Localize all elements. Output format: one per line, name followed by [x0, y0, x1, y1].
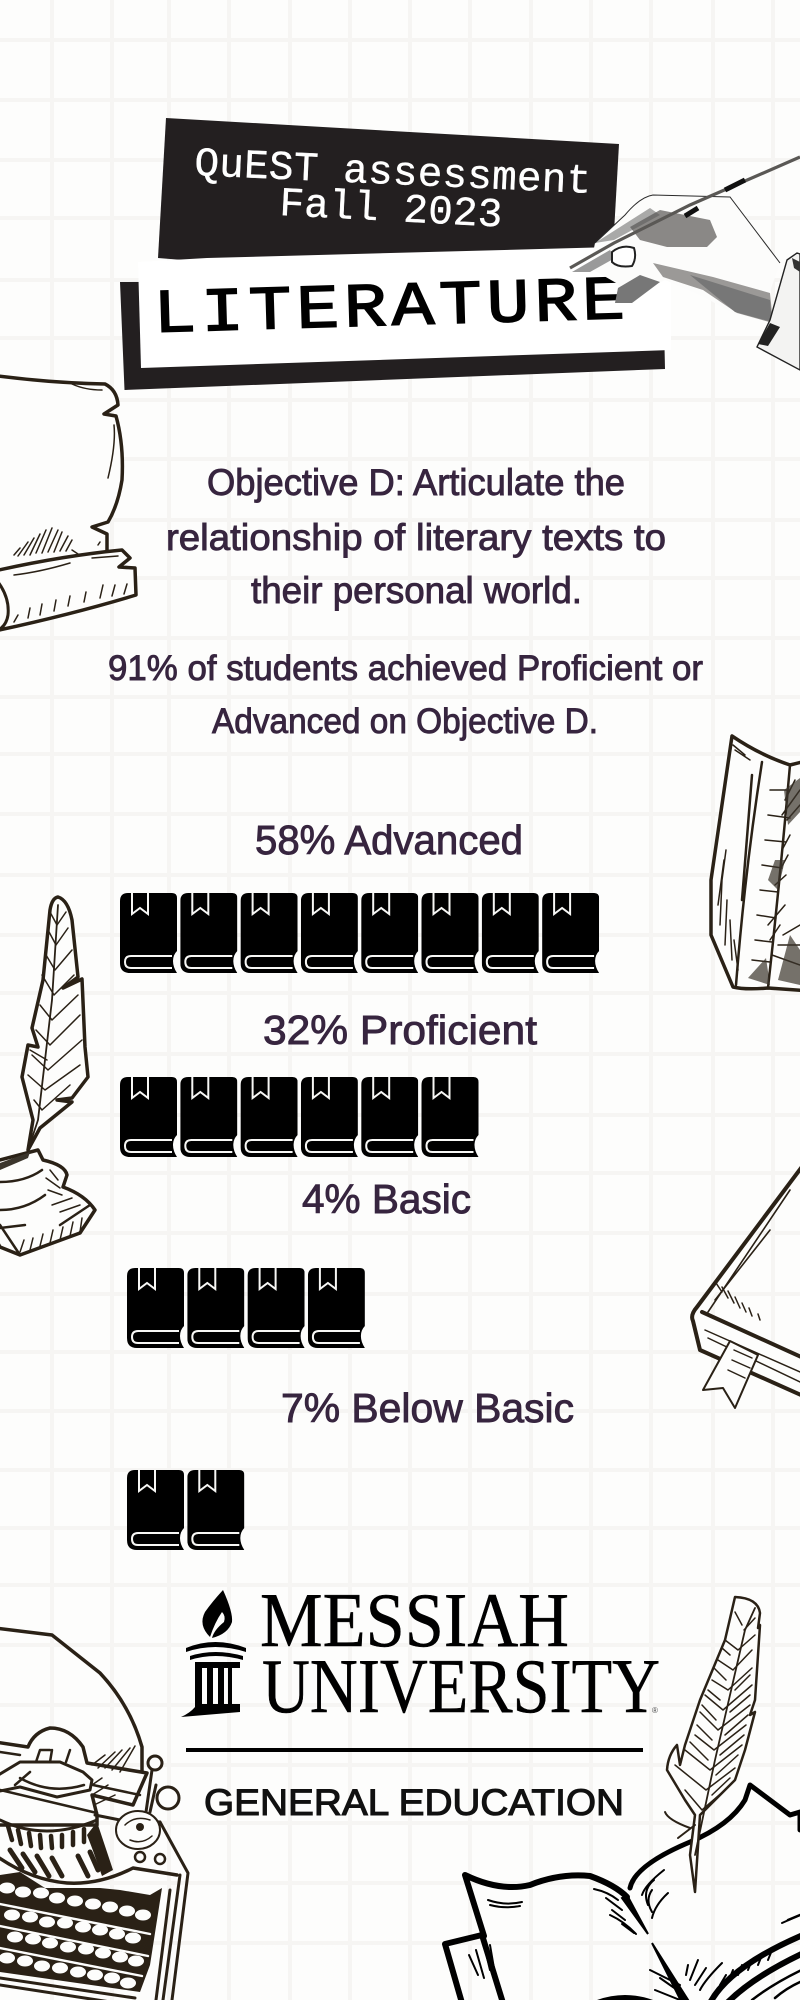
title banner: LITERATURE [120, 247, 671, 390]
label: 4% Basic: 4% Basic [302, 1176, 471, 1222]
heading: objective statement: their personal world. [251, 570, 582, 611]
pictogram: 2 books for Below Basic [127, 1470, 244, 1550]
logo: Messiah University torch [181, 1590, 246, 1717]
illustration: typewriter [0, 1628, 188, 2000]
pictogram: 6 books for Proficient [120, 1077, 478, 1157]
illustration: paper scroll [0, 375, 136, 632]
title banner: QuEST assessment Fall 2023 [158, 118, 619, 262]
title banner: LITERATURE: LITERATURE [152, 267, 626, 351]
title banner: QuEST assessment Fall 2023: Fall 2023 [278, 182, 503, 240]
logo: Messiah University wordmark: ® [652, 1706, 658, 1715]
title banner: QuEST assessment Fall 2023: QuEST assessment [193, 142, 592, 206]
label: 58% Advanced: 58% Advanced [255, 817, 523, 863]
illustration: quill in inkwell [0, 897, 95, 1255]
logo: Messiah University wordmark: UNIVERSITY [262, 1643, 660, 1729]
illustration: open book at bottom right [445, 1785, 800, 2000]
divider line in logo [186, 1748, 643, 1752]
logo: General Education: GENERAL EDUCATION [204, 1782, 624, 1823]
logo: Messiah University wordmark [260, 1577, 660, 1729]
text block: overall result: Advanced on Objective D. [212, 702, 598, 741]
illustration: feather at bottom right [665, 1597, 760, 1892]
label: 7% Below Basic: 7% Below Basic [281, 1385, 574, 1431]
pictogram: 8 books for Advanced [120, 893, 599, 973]
illustration: open book on right edge [692, 1156, 800, 1408]
illustration: hand holding pen [570, 157, 800, 370]
logo: Messiah University wordmark: MESSIAH [260, 1577, 569, 1663]
illustration: closed book on right [711, 736, 800, 991]
heading: objective statement [166, 462, 666, 611]
heading: objective statement: relationship of literary texts to [166, 517, 666, 558]
heading: objective statement: Objective D: Articulate the [207, 462, 625, 503]
label: 32% Proficient: 32% Proficient [263, 1007, 538, 1053]
pictogram: 4 books for Basic [127, 1268, 365, 1348]
text block: overall result [108, 649, 703, 741]
text block: overall result: 91% of students achieved Proficient or [108, 649, 703, 688]
